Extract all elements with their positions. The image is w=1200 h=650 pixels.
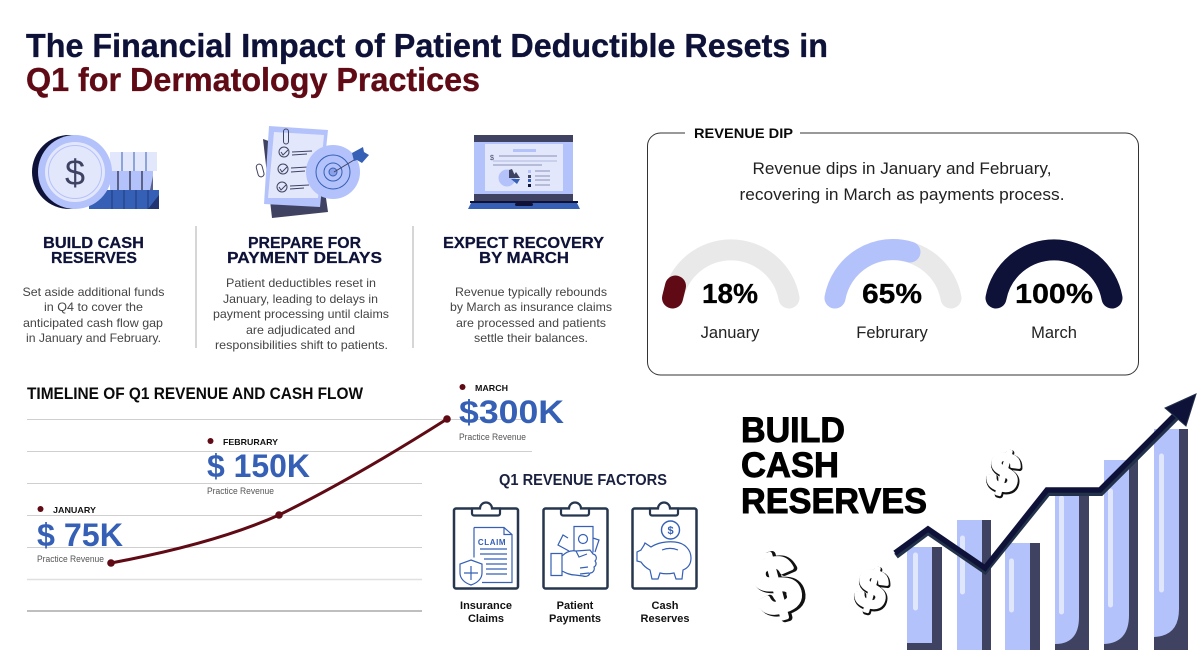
icon: dollar signs: $ [743, 537, 809, 634]
text block [450, 285, 612, 345]
title [26, 27, 828, 98]
text block: Patient deductibles reset in [226, 276, 376, 290]
bar chart with rising arrow [895, 394, 1196, 650]
label: patient payments: Payments [549, 613, 601, 625]
gauge: March [996, 250, 1112, 342]
label: cash reserves [641, 600, 689, 625]
label: February: Practice Revenue [207, 486, 274, 496]
text block: in January and February. [26, 331, 161, 345]
icon: dollar signs: $ [981, 440, 1026, 505]
gauge: February: 65% [862, 278, 922, 309]
icon: laptop with report: $ [490, 155, 494, 162]
text block: are processed and patients [456, 316, 606, 330]
heading: PREPARE FOR [248, 235, 361, 252]
heading [227, 235, 382, 267]
text block [213, 276, 389, 352]
icon: laptop with report [468, 135, 580, 209]
panel: expect recovery by march [443, 135, 612, 345]
text block: January, leading to delays in [223, 292, 378, 306]
icon: checklist and target [256, 126, 369, 218]
gauge: January: 18% [702, 278, 758, 309]
icon: dollar signs [743, 440, 1027, 635]
icon: dollar signs: $ [745, 537, 811, 635]
icon: insurance claims [454, 502, 518, 588]
icon: dollar signs: $ [850, 558, 895, 624]
heading: timeline: TIMELINE OF Q1 REVENUE AND CASH FLOW [27, 385, 363, 403]
heading: Q1 REVENUE FACTORS [499, 472, 667, 489]
label: February: $ 150K [207, 448, 310, 484]
gauge: March: March [1031, 324, 1077, 342]
gauge: January: January [701, 324, 760, 342]
text block [740, 160, 1064, 204]
label: February: FEBRURARY [223, 437, 278, 447]
label: insurance claims [460, 600, 512, 625]
heading: REVENUE DIP [694, 126, 793, 141]
text block: Set aside additional funds [22, 285, 164, 299]
icon: dollar signs: $ [849, 557, 894, 622]
heading: PAYMENT DELAYS [227, 250, 382, 267]
text block: anticipated cash flow gap [23, 316, 163, 330]
text block: in Q4 to cover the [44, 300, 143, 314]
label: January: $ 75K [37, 517, 123, 553]
gauge: February: Februrary [856, 324, 929, 342]
label: insurance claims: Insurance [460, 600, 512, 612]
label: cash reserves: Reserves [641, 613, 689, 625]
label: March: MARCH [475, 383, 508, 393]
title: Q1 for Dermatology Practices [26, 61, 480, 98]
label: patient payments: Patient [557, 600, 594, 612]
text block: are adjudicated and [246, 323, 355, 337]
panel: build cash reserves [22, 135, 164, 345]
line chart: timeline [27, 383, 564, 611]
label: January: JANUARY [53, 505, 96, 515]
heading [443, 235, 604, 267]
title: The Financial Impact of Patient Deductible Resets in [26, 27, 828, 64]
heading: BY MARCH [479, 250, 569, 267]
text block: recovering in March as payments process. [740, 186, 1064, 204]
heading: build cash reserves [741, 411, 927, 521]
label: March [459, 383, 564, 442]
icon: patient payments [544, 502, 608, 588]
panel: prepare for payment delays [213, 126, 389, 352]
gauge: January [672, 250, 789, 342]
gauge: February [835, 250, 951, 342]
icon: coin and stacked bills: $ [65, 152, 85, 193]
text block: Revenue typically rebounds [455, 285, 607, 299]
text block: Revenue dips in January and February, [752, 160, 1052, 178]
heading: build cash reserves: RESERVES [741, 482, 927, 521]
text block: by March as insurance claims [450, 300, 612, 314]
label: insurance claims: Claims [468, 613, 504, 625]
panel: revenue dip [648, 126, 1138, 375]
label: March: $300K [459, 394, 564, 430]
heading: EXPECT RECOVERY [443, 235, 604, 252]
text block: settle their balances. [474, 331, 588, 345]
icon: dollar signs: $ [982, 441, 1027, 507]
icon: cash reserves [632, 502, 696, 588]
heading: RESERVES [51, 250, 137, 267]
icon: cash reserves: $ [667, 525, 674, 537]
label: cash reserves: Cash [652, 600, 679, 612]
text block: payment processing until claims [213, 307, 389, 321]
label: January: Practice Revenue [37, 554, 104, 564]
heading: build cash reserves: BUILD [741, 411, 845, 450]
heading [43, 235, 144, 267]
label: March: Practice Revenue [459, 432, 526, 442]
label: February [207, 437, 310, 496]
label: January [37, 505, 123, 564]
heading: build cash reserves: CASH [741, 446, 839, 485]
label: patient payments [549, 600, 601, 625]
text block: responsibilities shift to patients. [215, 338, 388, 352]
text block [22, 285, 164, 345]
panel: Q1 revenue factors [454, 472, 696, 625]
heading: BUILD CASH [43, 235, 144, 252]
gauge: March: 100% [1015, 278, 1093, 309]
icon: insurance claims: CLAIM [478, 538, 506, 547]
icon: coin and stacked bills [32, 135, 159, 209]
